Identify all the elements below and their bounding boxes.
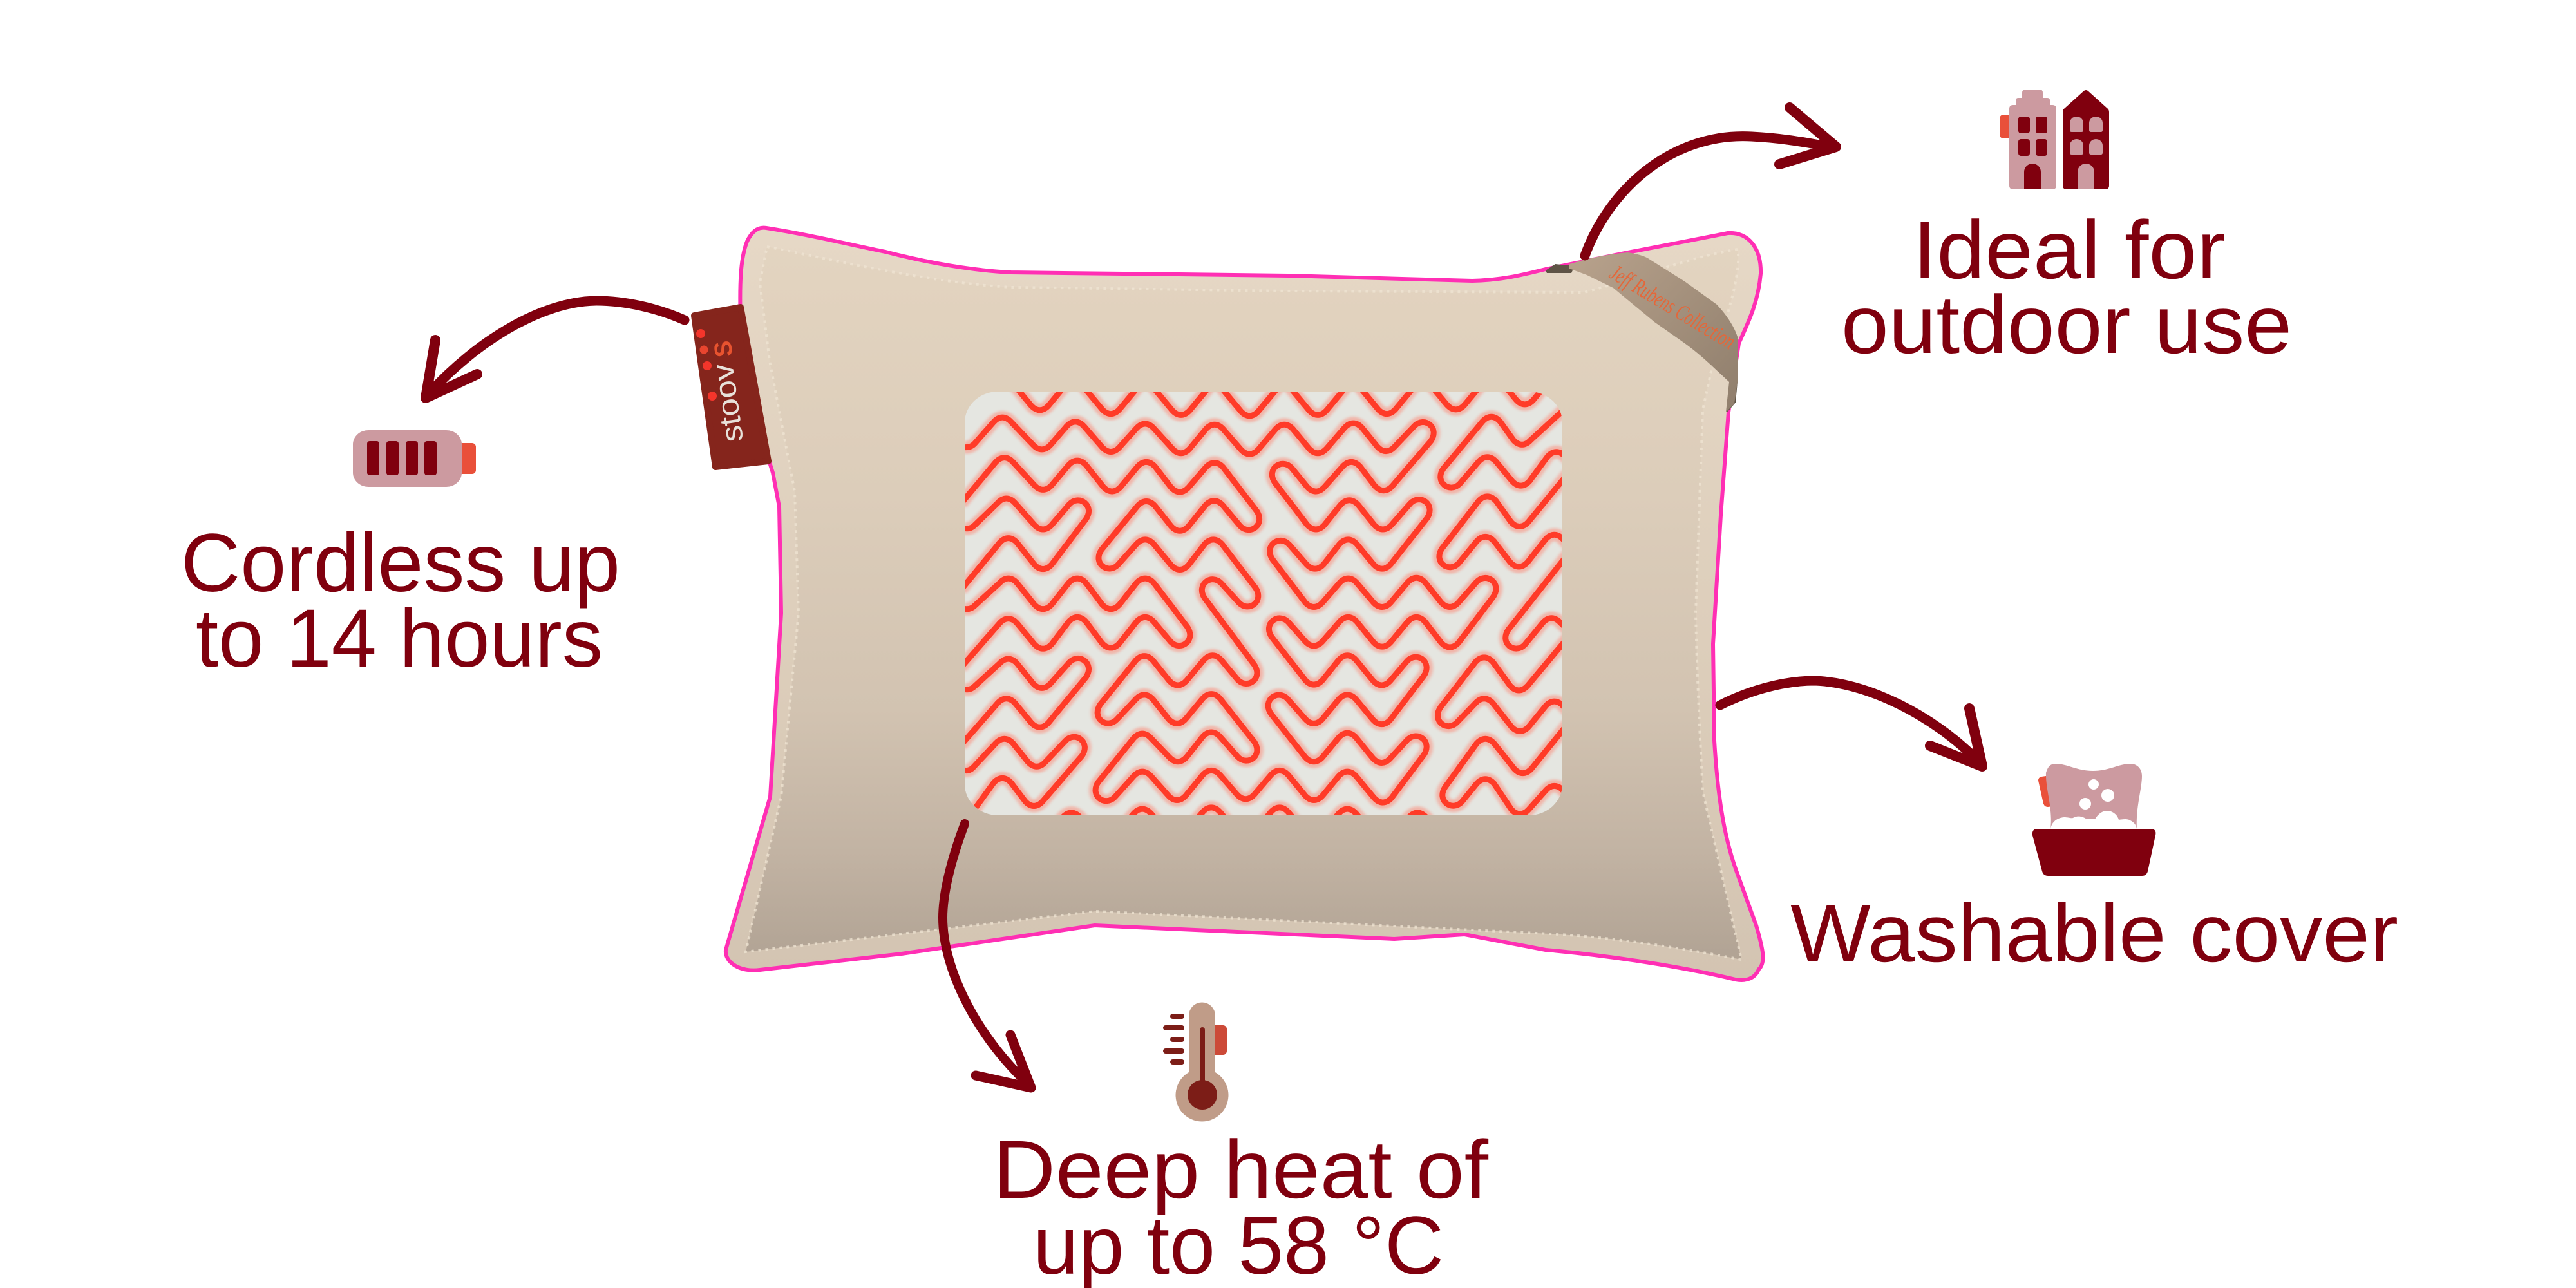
text: cordless [181,517,620,685]
sewn label: stoov tag [694,307,768,467]
text: cordless: Cordless up [181,517,620,609]
pillow inner panel with stitched seam [746,247,1741,960]
text: deep heat [993,1124,1488,1288]
icon: battery [353,430,476,487]
text: outdoor use [1841,204,2292,371]
panel: heated pillow [694,228,1763,980]
pillow outer shape with pink outline [726,228,1763,980]
sewn label: stoov tag: stoov [705,362,750,444]
text: deep heat: Deep heat of [993,1124,1488,1216]
arrow: cordless [426,301,685,398]
arrow: outdoor use [1585,108,1836,256]
signature strap across corner [1546,252,1740,412]
arrow: washable cover [1720,681,1982,766]
arrow: deep heat [943,824,1031,1088]
icon: canal houses [2000,90,2109,189]
heating window with serpentine coil [965,392,1562,815]
icon: washing basin [2032,764,2155,876]
text: cordless: to 14 hours [196,592,603,685]
text: outdoor use: Ideal for [1913,204,2226,296]
text: washable cover: Washable cover [1790,887,2398,980]
sewn label: stoov tag: S [709,339,739,359]
text: outdoor use: outdoor use [1841,279,2292,371]
signature strap across corner: Jeff Rubens Collection [1605,260,1740,354]
icon: thermometer [1166,1002,1228,1122]
